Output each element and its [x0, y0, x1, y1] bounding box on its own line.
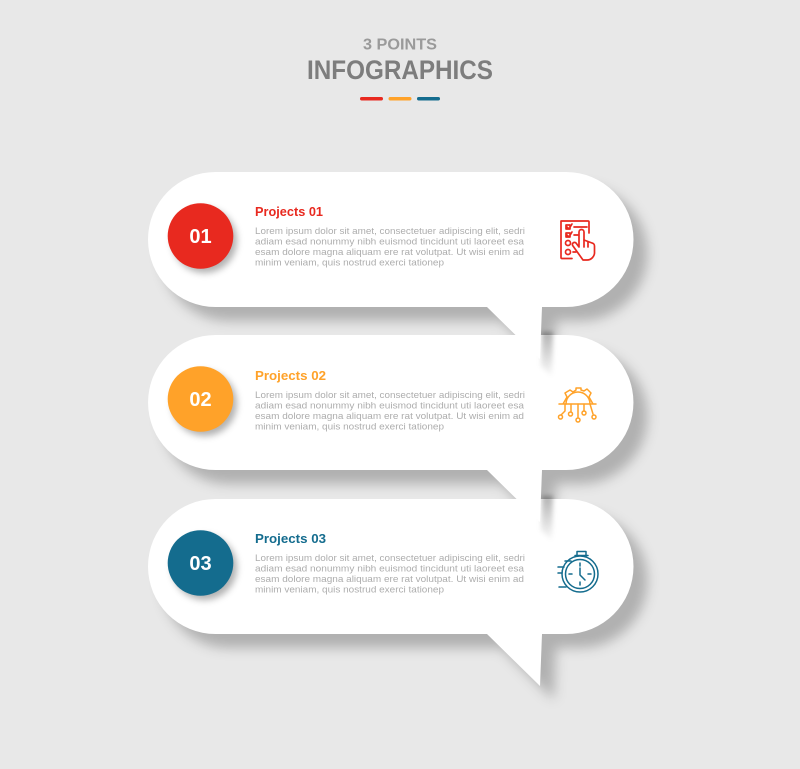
- number badge: [168, 530, 237, 600]
- body text: esam dolore magna aliquam ere rat volutpat. Ut wisi enim ad: [255, 411, 524, 422]
- subtitle: 3 POINTS: [363, 36, 437, 54]
- body text: esam dolore magna aliquam ere rat volutpat. Ut wisi enim ad: [255, 574, 524, 585]
- body text: Lorem ipsum dolor sit amet, consectetuer adipiscing elit, sedri: [255, 390, 525, 401]
- heading: Projects 01: [255, 204, 323, 219]
- number badge: 02: [189, 389, 212, 411]
- number badge: [168, 366, 237, 436]
- body text: Lorem ipsum dolor sit amet, consectetuer adipiscing elit, sedri: [255, 553, 525, 564]
- number badge: 01: [189, 226, 212, 248]
- speech bubble card: [148, 499, 634, 686]
- tail shadow from card above: [541, 332, 553, 378]
- panel: projects 02: [148, 332, 633, 522]
- body text: [255, 553, 525, 596]
- card shadows: [161, 186, 647, 700]
- colour dashes: [360, 97, 440, 100]
- speech bubble card: [148, 172, 634, 359]
- body text: minim veniam, quis nostrud exerci tationep: [255, 584, 444, 596]
- panel: projects 01: [148, 172, 634, 359]
- icon: stopwatch: [558, 552, 598, 592]
- body text: minim veniam, quis nostrud exerci tationep: [255, 422, 444, 432]
- number badge: [168, 203, 237, 273]
- icon: checklist with pointing hand: [561, 221, 595, 260]
- body text: adiam esad nonummy nibh euismod tincidunt uti laoreet esa: [255, 564, 525, 574]
- tail shadow from card above: [541, 496, 553, 542]
- heading: Projects 03: [255, 531, 326, 546]
- body text: adiam esad nonummy nibh euismod tincidunt uti laoreet esa: [255, 236, 525, 248]
- heading: Projects 02: [255, 368, 326, 383]
- body text: esam dolore magna aliquam ere rat volutpat. Ut wisi enim ad: [255, 247, 524, 258]
- speech bubble card: [148, 335, 633, 522]
- body text: Lorem ipsum dolor sit amet, consectetuer adipiscing elit, sedri: [255, 226, 525, 237]
- body text: minim veniam, quis nostrud exerci tationep: [255, 258, 444, 268]
- body text: [255, 390, 525, 432]
- body text: adiam esad nonummy nibh euismod tincidunt uti laoreet esa: [255, 400, 525, 412]
- title block: [307, 36, 493, 100]
- heading: INFOGRAPHICS: [307, 55, 493, 85]
- number badge: 03: [189, 553, 212, 575]
- icon: gear with circuit: [558, 388, 596, 422]
- panel: projects 03: [148, 496, 634, 686]
- body text: [255, 226, 525, 268]
